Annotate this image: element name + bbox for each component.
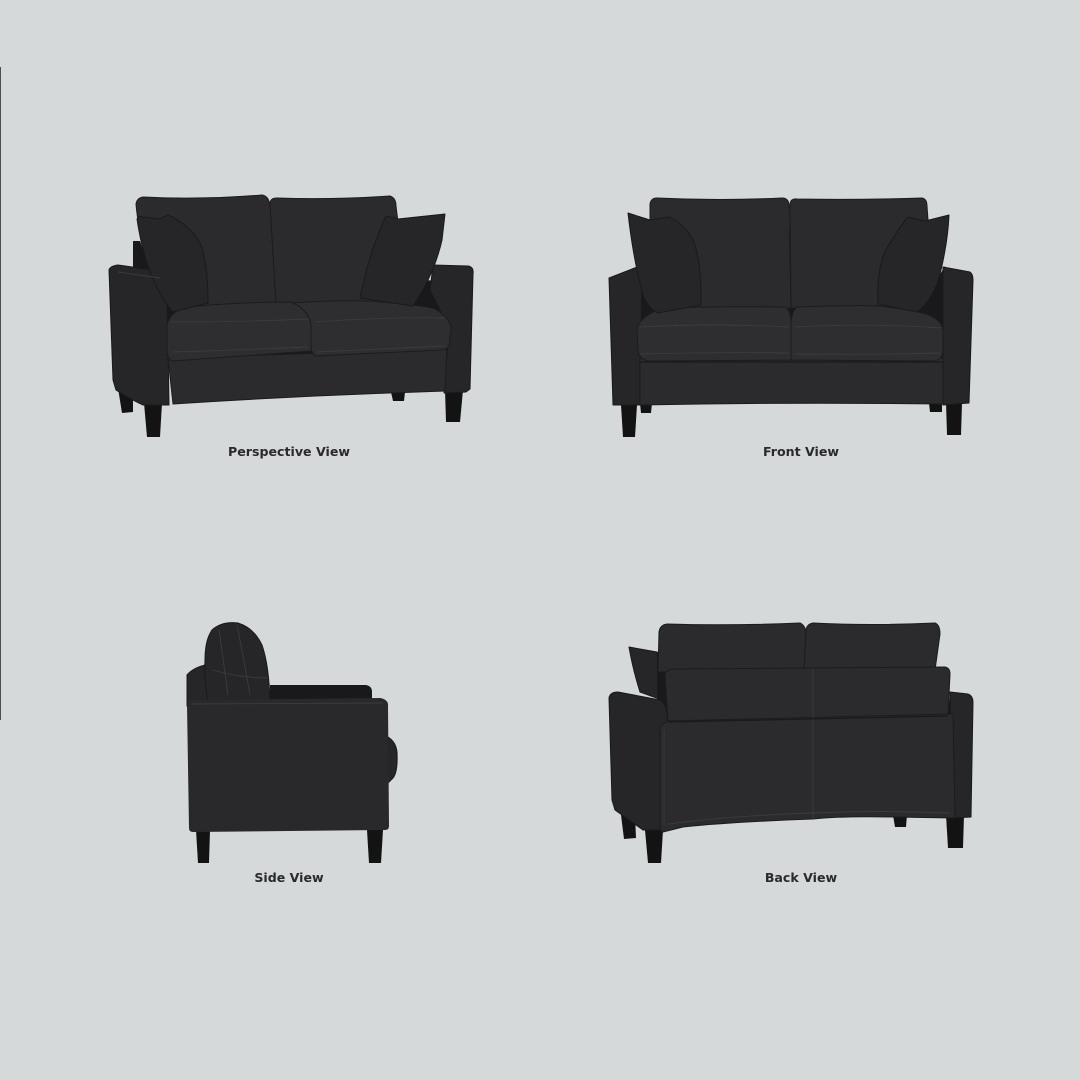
label: back view: Back View [765, 870, 838, 885]
panel: perspective view sofa [109, 195, 473, 437]
label: side view: Side View [254, 870, 324, 885]
label: front view: Front View [763, 444, 839, 459]
panel: back view sofa [609, 623, 973, 863]
panel: side view sofa [187, 623, 397, 863]
label: perspective view: Perspective View [228, 444, 350, 459]
panel: front view sofa [609, 198, 973, 437]
